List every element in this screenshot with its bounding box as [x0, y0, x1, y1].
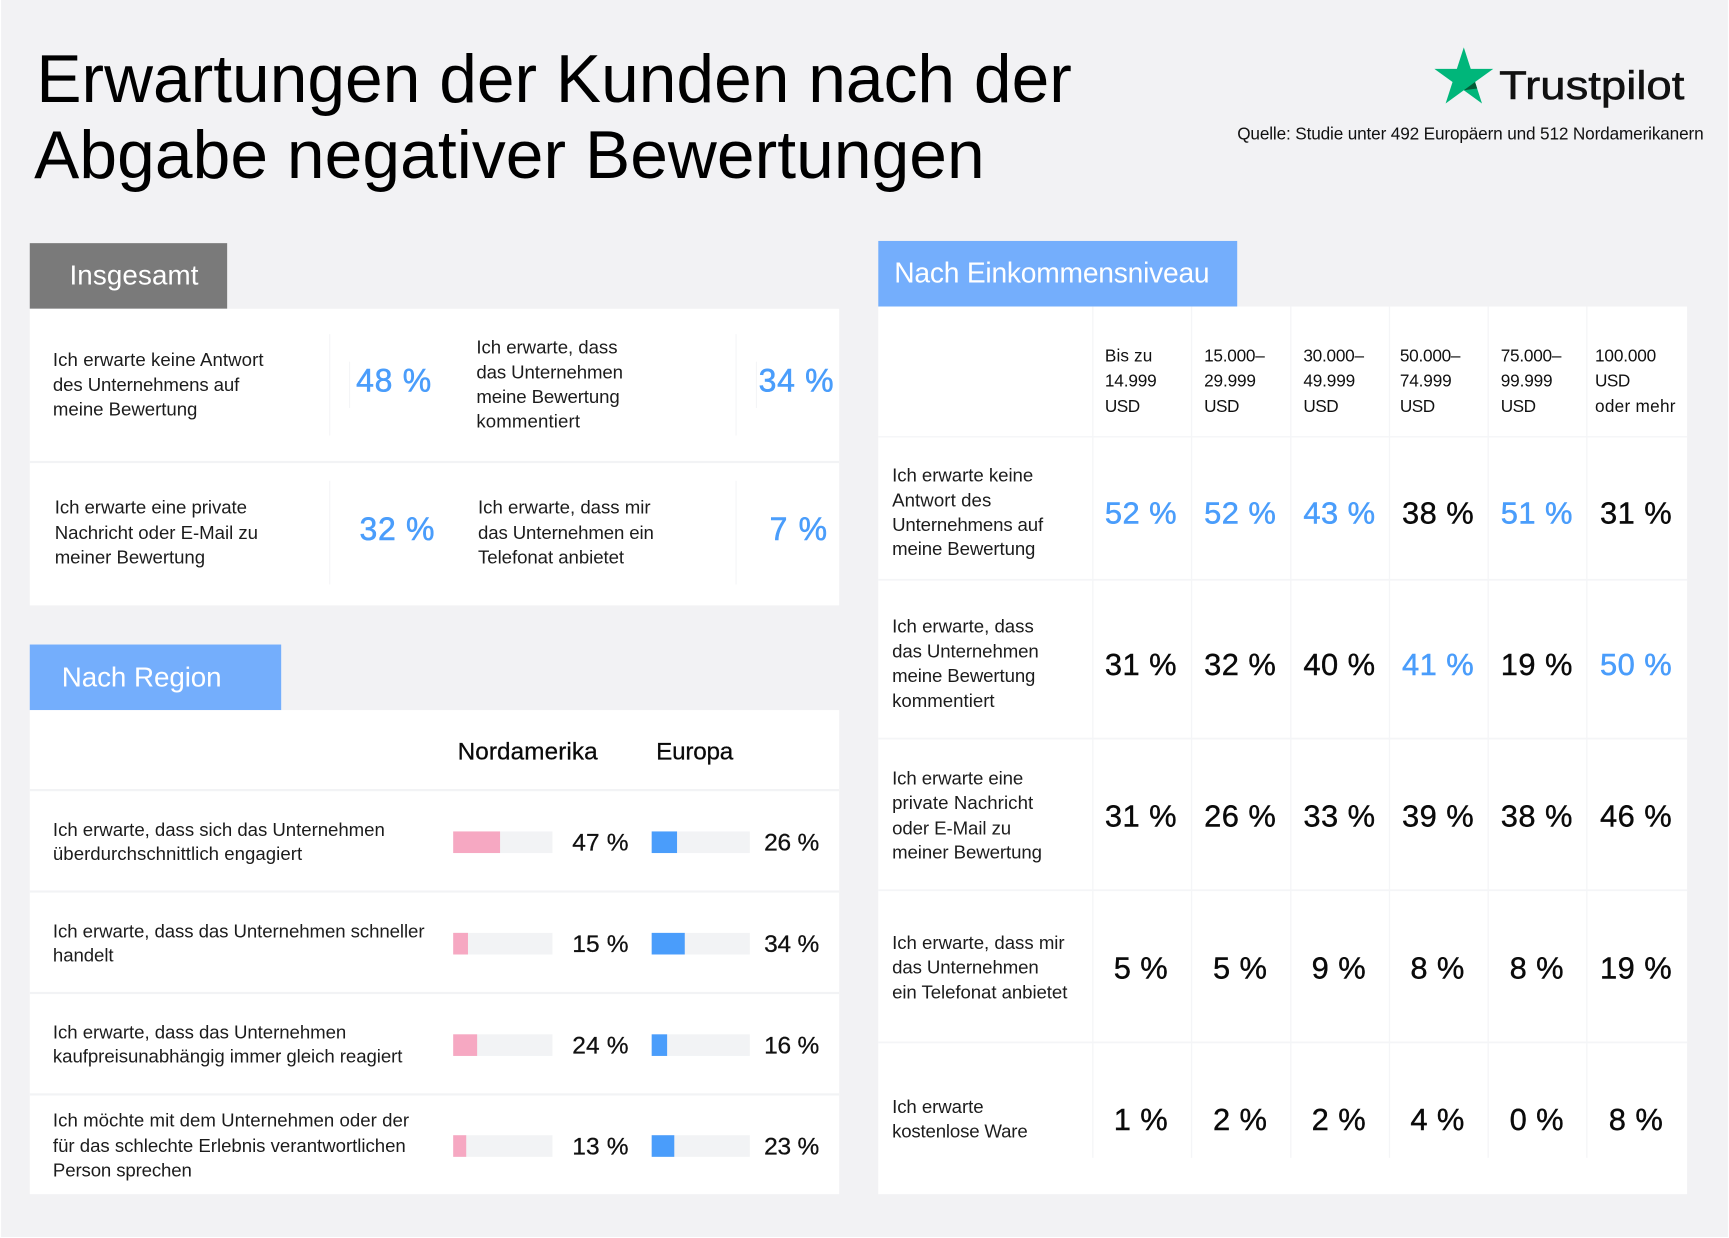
row: keine Antwort: 52 % — [1204, 495, 1276, 530]
row: kommentiert — [892, 616, 1672, 711]
panel: Insgesamt — [30, 243, 839, 605]
row: überdurchschnittlich engagiert — [53, 819, 819, 864]
heading tab: Insgesamt — [30, 243, 227, 309]
heading tab: Nach Einkommensniveau: Nach Einkommensniveau — [894, 257, 1210, 289]
row: überdurchschnittlich engagiert: 47 % — [572, 830, 629, 857]
row: keine Antwort: Antwort des — [892, 489, 991, 510]
row: überdurchschnittlich engagiert: überdurchschnittlich engagiert — [53, 843, 303, 864]
statement: keine Antwort: meine Bewertung — [53, 399, 197, 420]
row: Telefonat: 19 % — [1600, 951, 1672, 986]
row: kommentiert: kommentiert — [892, 690, 995, 711]
statement: kommentiert — [476, 337, 623, 432]
row: überdurchschnittlich engagiert: Ich erwarte, dass sich das Unternehmen — [53, 819, 385, 840]
column header: Nordamerika: Nordamerika — [458, 738, 598, 765]
row: Telefonat: Ich erwarte, dass mir — [892, 932, 1065, 953]
row: kostenlose Ware: 8 % — [1609, 1102, 1663, 1137]
logo: Trustpilot: Trustpilot — [1499, 64, 1684, 108]
heading tab: Insgesamt: Insgesamt — [69, 260, 199, 291]
row: private Nachricht: 33 % — [1303, 798, 1375, 833]
row: kaufpreisunabhängig: 16 % — [764, 1032, 819, 1059]
row: Telefonat: 8 % — [1410, 951, 1464, 986]
row: keine Antwort: 38 % — [1402, 495, 1474, 530]
row: überdurchschnittlich engagiert: 26 % — [764, 830, 819, 857]
statement: private Nachricht: Nachricht oder E-Mail zu — [55, 522, 258, 543]
row: Telefonat — [892, 932, 1672, 1002]
income headers: oder mehr — [1595, 396, 1676, 416]
row: schneller handelt: 15 % — [572, 931, 629, 958]
row: schneller handelt: Ich erwarte, dass das Unternehmen schneller — [53, 920, 425, 941]
row: kommentiert: das Unternehmen — [892, 640, 1039, 661]
income headers: 50.000– — [1400, 345, 1461, 365]
value: 32 %: 32 % — [359, 511, 434, 547]
statement: kommentiert: meine Bewertung — [476, 386, 620, 407]
income headers: 29.999 — [1204, 371, 1256, 391]
statement: private Nachricht — [55, 497, 258, 567]
row: verantwortliche Person: 13 % — [572, 1134, 629, 1161]
row: schneller handelt: 34 % — [764, 931, 819, 958]
row: verantwortliche Person: für das schlechte Erlebnis verantwortlichen — [53, 1135, 406, 1156]
row: private Nachricht: 39 % — [1402, 798, 1474, 833]
source note: Quelle: Studie unter 492 Europäern und 512 Nordamerikanern — [1237, 124, 1704, 144]
row: Telefonat: ein Telefonat anbietet — [892, 981, 1068, 1002]
title — [34, 42, 1072, 193]
statement: Telefonat: Ich erwarte, dass mir — [478, 497, 651, 518]
income headers: Bis zu — [1105, 345, 1152, 365]
row: private Nachricht: 31 % — [1105, 798, 1177, 833]
row: kaufpreisunabhängig: 24 % — [572, 1032, 629, 1059]
row: schneller handelt: handelt — [53, 945, 114, 966]
row: kostenlose Ware: kostenlose Ware — [892, 1121, 1028, 1142]
row: keine Antwort: 43 % — [1303, 495, 1375, 530]
heading tab: Nach Region: Nach Region — [62, 661, 222, 692]
row: kostenlose Ware: 1 % — [1114, 1102, 1168, 1137]
row: kommentiert: 19 % — [1501, 647, 1572, 682]
row: kaufpreisunabhängig: kaufpreisunabhängig immer gleich reagiert — [53, 1046, 403, 1067]
income headers: USD — [1501, 396, 1536, 416]
value: 7 %: 7 % — [770, 511, 827, 547]
statement: keine Antwort — [53, 349, 264, 420]
statement: private Nachricht: Ich erwarte eine private — [55, 497, 247, 518]
income headers: 30.000– — [1303, 345, 1364, 365]
row: private Nachricht: 38 % — [1501, 798, 1572, 833]
panel: Nach Einkommensniveau — [878, 241, 1687, 1194]
row: kommentiert: 31 % — [1105, 647, 1177, 682]
income headers: 49.999 — [1303, 371, 1355, 391]
row: kommentiert: meine Bewertung — [892, 665, 1035, 686]
column header: Europa: Europa — [656, 738, 734, 765]
row: Telefonat: das Unternehmen — [892, 956, 1039, 977]
income headers: 14.999 — [1105, 371, 1157, 391]
icon: green star — [1434, 47, 1493, 103]
row: kaufpreisunabhängig — [53, 1021, 819, 1067]
value: 34 %: 34 % — [759, 362, 834, 398]
row: keine Antwort: 52 % — [1105, 495, 1177, 530]
heading tab: Nach Region — [30, 645, 281, 710]
income headers: 74.999 — [1400, 371, 1452, 391]
statement: kommentiert: kommentiert — [476, 411, 581, 432]
row: kaufpreisunabhängig: Ich erwarte, dass das Unternehmen — [53, 1021, 346, 1042]
income headers: USD — [1303, 396, 1339, 416]
heading tab: Nach Einkommensniveau — [878, 241, 1237, 307]
statement: kommentiert: das Unternehmen — [476, 361, 623, 382]
row: verantwortliche Person — [53, 1110, 819, 1181]
row: private Nachricht: 26 % — [1204, 798, 1276, 833]
row: schneller handelt — [53, 920, 819, 966]
row: private Nachricht: private Nachricht — [892, 792, 1034, 813]
row: kostenlose Ware: 2 % — [1312, 1102, 1366, 1137]
row: keine Antwort: Ich erwarte keine — [892, 464, 1033, 485]
row: keine Antwort — [892, 464, 1672, 559]
income headers: USD — [1204, 396, 1239, 416]
row: Telefonat: 8 % — [1510, 951, 1564, 986]
row: kommentiert: 40 % — [1303, 647, 1375, 682]
panel: Nach Region — [30, 645, 839, 1194]
row: private Nachricht: oder E-Mail zu — [892, 817, 1011, 838]
row: kommentiert: 41 % — [1402, 647, 1474, 682]
row: private Nachricht — [892, 767, 1672, 863]
row: kommentiert: 32 % — [1204, 647, 1276, 682]
income headers: 99.999 — [1501, 371, 1553, 391]
row: kostenlose Ware: 2 % — [1213, 1102, 1267, 1137]
statement: Telefonat: Telefonat anbietet — [478, 546, 625, 567]
row: private Nachricht: meiner Bewertung — [892, 842, 1042, 863]
row: kostenlose Ware — [892, 1096, 1663, 1142]
row: Telefonat: 9 % — [1312, 951, 1366, 986]
row: keine Antwort: 51 % — [1501, 495, 1572, 530]
row: Telefonat: 5 % — [1114, 951, 1168, 986]
row: kostenlose Ware: 4 % — [1410, 1102, 1464, 1137]
statement: Telefonat: das Unternehmen ein — [478, 522, 654, 543]
row: Telefonat: 5 % — [1213, 951, 1267, 986]
income headers: 75.000– — [1501, 345, 1562, 365]
row: kostenlose Ware: Ich erwarte — [892, 1096, 984, 1117]
logo: Trustpilot — [1434, 47, 1684, 108]
row: kommentiert: Ich erwarte, dass — [892, 616, 1034, 637]
value: 48 %: 48 % — [356, 362, 431, 398]
income headers: USD — [1400, 396, 1435, 416]
row: kostenlose Ware: 0 % — [1510, 1102, 1564, 1137]
income headers: USD — [1105, 396, 1140, 416]
row: verantwortliche Person: Ich möchte mit dem Unternehmen oder der — [53, 1110, 409, 1131]
row: verantwortliche Person: 23 % — [764, 1134, 819, 1161]
statement: kommentiert: Ich erwarte, dass — [476, 337, 618, 358]
row: keine Antwort: 31 % — [1600, 495, 1672, 530]
income headers — [1105, 345, 1676, 416]
income headers: USD — [1595, 371, 1630, 391]
statement: keine Antwort: Ich erwarte keine Antwort — [53, 349, 264, 370]
row: verantwortliche Person: Person sprechen — [53, 1160, 192, 1181]
row: keine Antwort: Unternehmens auf — [892, 514, 1044, 535]
statement: private Nachricht: meiner Bewertung — [55, 546, 205, 567]
row: keine Antwort: meine Bewertung — [892, 538, 1035, 559]
statement: keine Antwort: des Unternehmens auf — [53, 374, 240, 395]
income headers: 100.000 — [1595, 345, 1656, 365]
income headers: 15.000– — [1204, 345, 1265, 365]
row: kommentiert: 50 % — [1600, 647, 1672, 682]
statement: Telefonat — [478, 497, 654, 567]
title: Erwartungen der Kunden nach der — [36, 42, 1072, 117]
row: private Nachricht: 46 % — [1600, 798, 1672, 833]
row: private Nachricht: Ich erwarte eine — [892, 767, 1023, 788]
title: Abgabe negativer Bewertungen — [34, 118, 985, 193]
